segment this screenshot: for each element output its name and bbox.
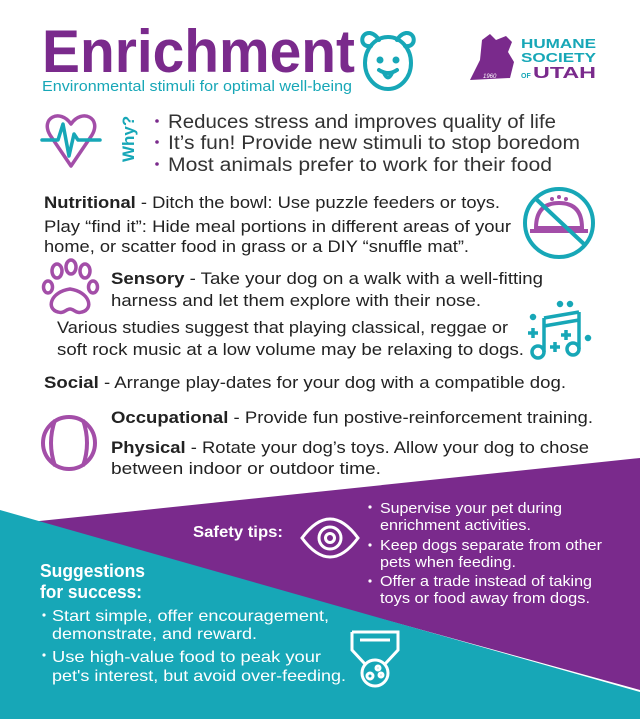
title: Enrichment [42, 18, 355, 85]
logo: 1960 [483, 74, 497, 80]
logo: HUMANE [521, 37, 596, 51]
icon: no bowl [525, 189, 593, 257]
safety bullets: Keep dogs separate from other [380, 537, 602, 554]
safety bullets: pets when feeding. [380, 554, 516, 571]
safety tips heading: Safety tips: [193, 524, 283, 541]
logo: OF [521, 73, 531, 80]
why bullets: Most animals prefer to work for their food [168, 155, 552, 176]
occupational and physical text: between indoor or outdoor time. [111, 459, 381, 478]
occupational and physical text: Occupational - Provide fun postive-reinforcement training. [111, 408, 593, 427]
why label: Why? [119, 116, 138, 162]
why bullets [155, 112, 580, 176]
subtitle: Environmental stimuli for optimal well-being [42, 78, 352, 95]
icon: dog face [362, 33, 414, 89]
suggestions heading: for success: [40, 582, 142, 602]
suggestions bullets: demonstrate, and reward. [52, 626, 257, 643]
icon: medal [352, 632, 398, 686]
sensory text: harness and let them explore with their nose. [111, 291, 481, 310]
sensory text: soft rock music at a low volume may be relaxing to dogs. [57, 340, 524, 359]
icon: ball [43, 417, 95, 469]
safety bullets: Supervise your pet during [380, 500, 562, 517]
sensory text: Sensory - Take your dog on a walk with a well-fitting [111, 269, 543, 288]
sensory text: Various studies suggest that playing classical, reggae or [57, 318, 508, 337]
suggestions bullets: Use high-value food to peak your [52, 649, 322, 666]
occupational and physical text: Physical - Rotate your dog’s toys. Allow your dog to chose [111, 438, 589, 457]
safety bullets: Offer a trade instead of taking [380, 573, 592, 590]
safety bullets [368, 500, 602, 607]
suggestions bullets [42, 608, 346, 685]
sensory text [57, 269, 543, 359]
nutritional text: Nutritional - Ditch the bowl: Use puzzle feeders or toys. [44, 193, 500, 212]
icon: eye [302, 519, 358, 557]
logo: SOCIETY [521, 51, 597, 65]
background shapes [0, 458, 640, 719]
icon: paw [44, 260, 98, 312]
suggestions bullets: Start simple, offer encouragement, [52, 608, 329, 625]
social text: Social - Arrange play-dates for your dog with a compatible dog. [44, 373, 566, 392]
occupational and physical text [111, 408, 593, 478]
icon: heart pulse [42, 116, 100, 166]
logo: UTAH [533, 65, 596, 82]
suggestions heading: Suggestions [40, 561, 145, 581]
suggestions bullets: pet's interest, but avoid over-feeding. [52, 668, 346, 685]
logo [470, 34, 597, 82]
why bullets: Reduces stress and improves quality of life [168, 112, 556, 133]
nutritional text: home, or scatter food in grass or a DIY “snuffle mat”. [44, 237, 469, 256]
safety bullets: toys or food away from dogs. [380, 590, 590, 607]
nutritional text [44, 193, 511, 256]
why bullets: It’s fun! Provide new stimuli to stop boredom [168, 133, 580, 154]
nutritional text: Play “find it”: Hide meal portions in different areas of your [44, 217, 511, 236]
safety bullets: enrichment activities. [380, 517, 531, 534]
icon: music note [528, 302, 590, 358]
